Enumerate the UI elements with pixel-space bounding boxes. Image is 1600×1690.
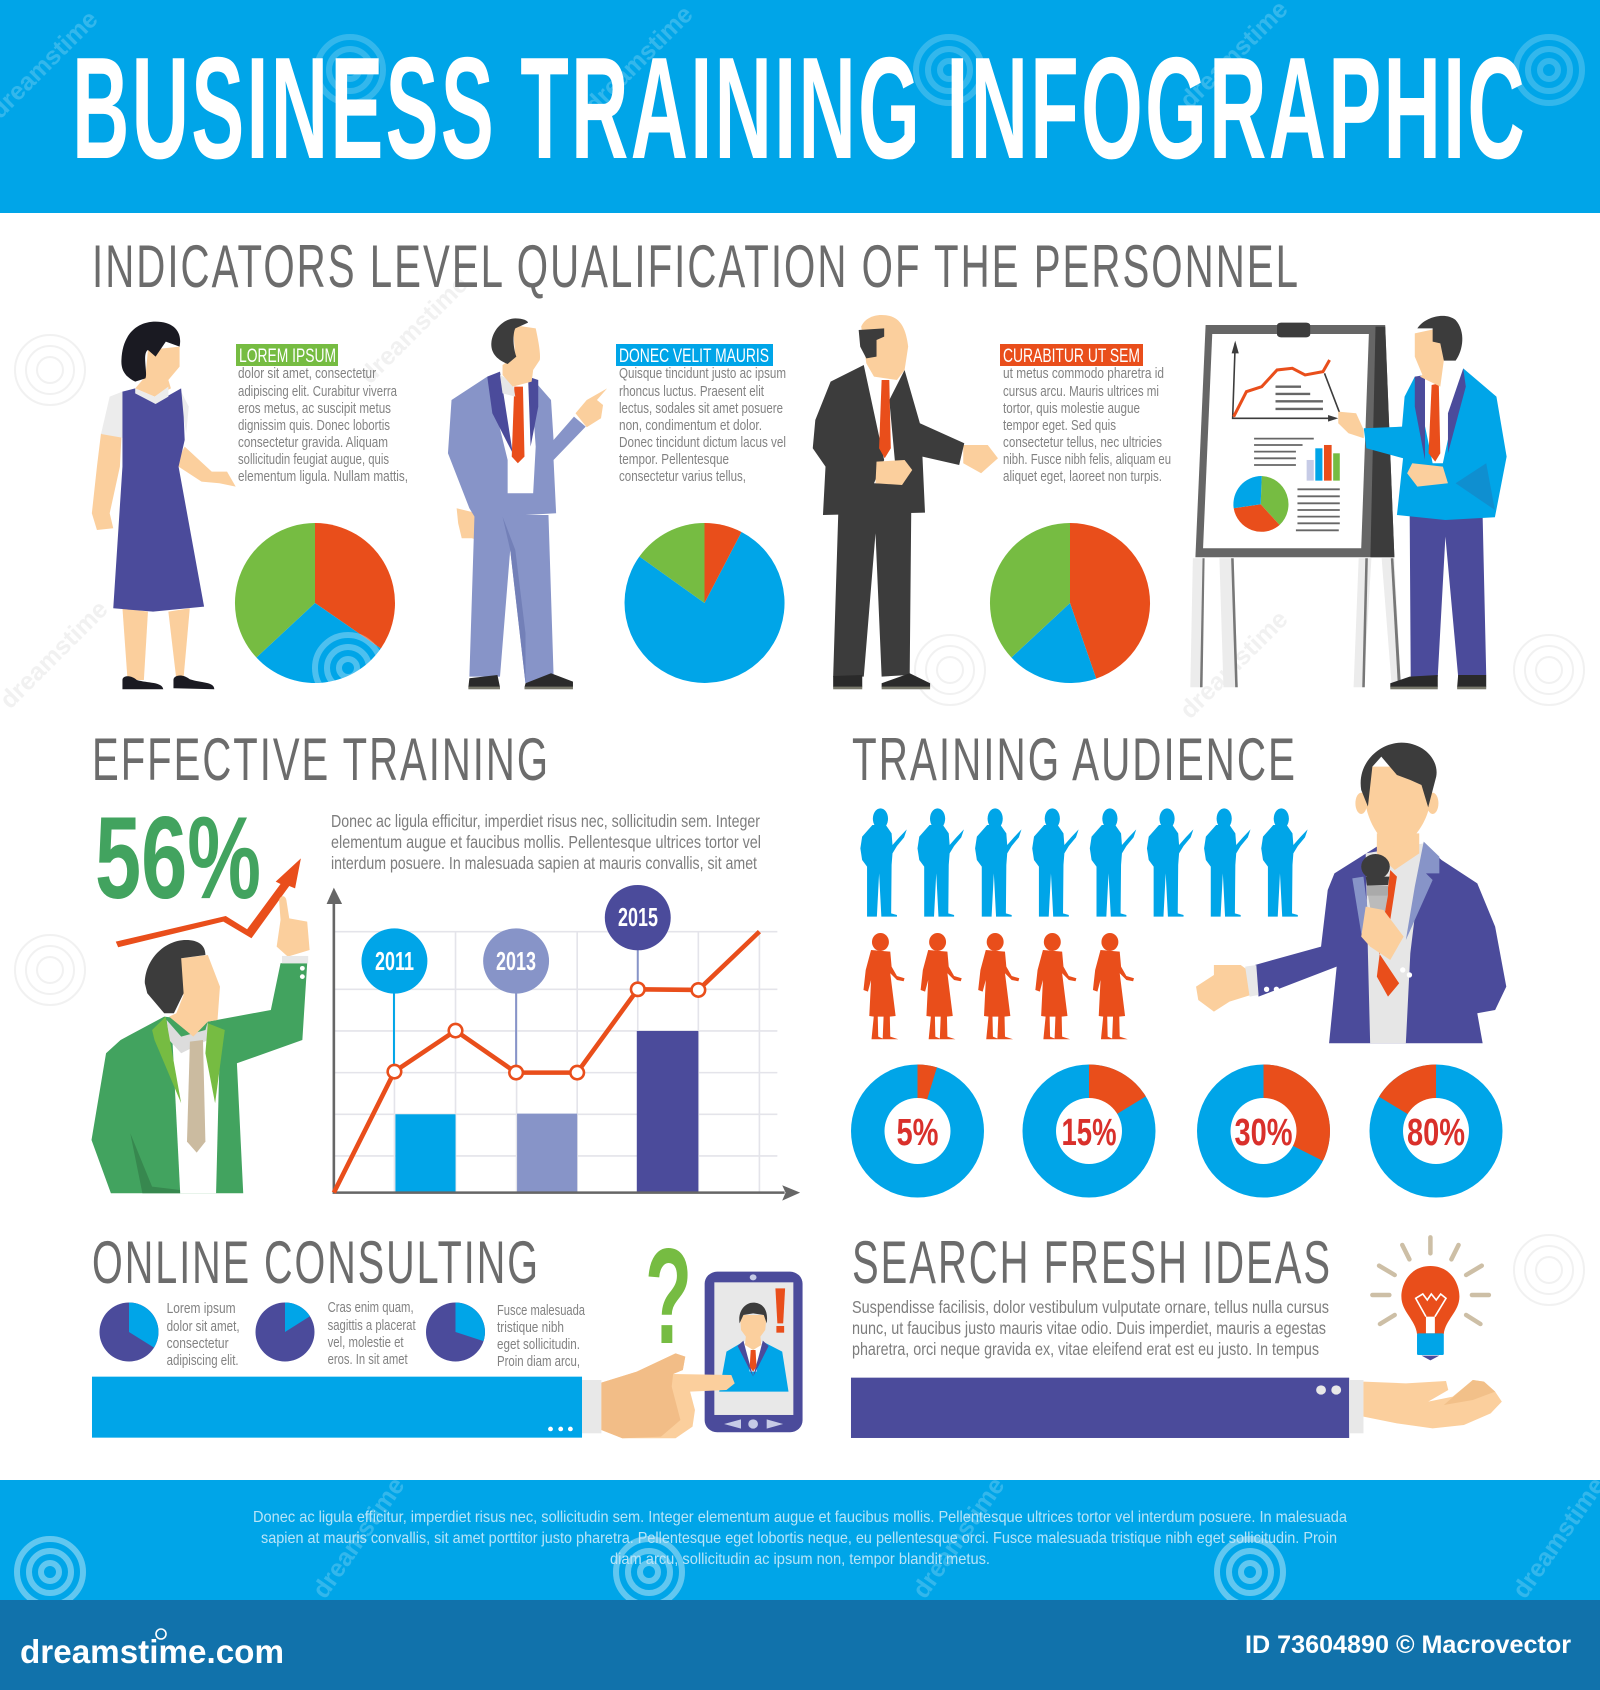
purple sleeve and open hand: [851, 1378, 1502, 1438]
footer text: sapien at mauris convallis, sit amet porttitor justo pharetra. Pellentesque eget lobortis neque, eu pellentesque orci. Fusce malesuada tristique nibh eget sollicitudin. Proin: [261, 1530, 1337, 1547]
text block 1: eros metus, ac suscipit metus: [238, 401, 391, 417]
text block 3: cursus arcu. Mauris ultrices mi: [1003, 384, 1159, 400]
text block: search fresh ideas: nunc, ut faucibus justo mauris vitae odio. Duis imperdiet, mauris a egestas: [852, 1318, 1326, 1338]
figure: man in black suit: [813, 315, 998, 689]
text block 2: Donec tincidunt dictum lacus vel: [619, 435, 786, 451]
mini text 2: eros. In sit amet: [328, 1352, 408, 1368]
label: donec velit mauris: DONEC VELIT MAURIS: [619, 346, 769, 367]
figure: speaker with microphone: [1196, 743, 1506, 1043]
text block: search fresh ideas: pharetra, orci neque gravida ex, vitae eleifend erat est eu justo. In tempus: [852, 1339, 1319, 1359]
line and bar chart: [327, 885, 800, 1201]
rising red arrow: [116, 858, 301, 947]
text block: effective training: Donec ac ligula efficitur, imperdiet risus nec, sollicitudin sem. Integer: [331, 811, 760, 831]
bar 2015: [637, 1031, 698, 1193]
mini pie 3: [426, 1302, 485, 1362]
text block 2: consectetur varius tellus,: [619, 469, 746, 485]
footer text: Donec ac ligula efficitur, imperdiet risus nec, sollicitudin sem. Integer elementum augue et faucibus mollis. Pellentesque ultrices tortor vel interdum posuere. In malesuada: [253, 1509, 1347, 1526]
mini text 1: [167, 1301, 240, 1369]
year labels: 2013: [496, 946, 536, 976]
donut 5 percent: [851, 1064, 984, 1198]
text block 2: tempor. Pellentesque: [619, 452, 729, 468]
mini text 3: tristique nibh: [497, 1320, 564, 1336]
text block 1: elementum ligula. Nullam mattis,: [238, 469, 408, 485]
mini pie 1: [100, 1302, 158, 1362]
pie chart 3: [990, 523, 1150, 683]
donut 30 percent: 30%: [1234, 1112, 1292, 1154]
question mark: ?: [645, 1220, 692, 1372]
text block 3: [1003, 366, 1171, 485]
year bubbles: [361, 928, 427, 994]
heading: search fresh ideas: SEARCH FRESH IDEAS: [852, 1229, 1332, 1296]
mini text 2: sagittis a placerat: [328, 1318, 416, 1334]
mini text 1: Lorem ipsum: [167, 1301, 236, 1317]
footer text: diam arcu, sollicitudin ac ipsum non, tempor blandit metus.: [610, 1551, 990, 1568]
statistic: 56 percent: 56%: [95, 792, 261, 923]
mini text 1: adipiscing elit.: [167, 1353, 239, 1369]
mini text 3: [497, 1303, 586, 1370]
text block: effective training: elementum augue et faucibus mollis. Pellentesque ultrices tortor vel: [331, 832, 761, 852]
credit bar: [0, 1600, 1600, 1690]
label: lorem ipsum: LOREM IPSUM: [239, 346, 336, 367]
text block 3: aliquet eget, laoreet non turpis.: [1003, 469, 1162, 485]
credit bar: ID 73604890 © Macrovector: [1245, 1631, 1571, 1659]
bar 2011: [395, 1114, 456, 1193]
pie chart 1: [235, 523, 395, 701]
mini text 3: eget sollicitudin.: [497, 1337, 580, 1353]
text block 3: ut metus commodo pharetra id: [1003, 366, 1164, 382]
text block 1: sollicitudin feugiat augue, quis: [238, 452, 389, 468]
red trend line: [334, 932, 759, 1193]
donut 5 percent: 5%: [896, 1112, 938, 1154]
figure: presenter in blue jacket: [1338, 316, 1507, 689]
audience: men row: [860, 808, 1308, 917]
label: lorem ipsum: [236, 344, 338, 367]
year labels: 2011: [375, 946, 414, 976]
label: donec velit mauris: [616, 344, 773, 367]
text block: search fresh ideas: [852, 1297, 1329, 1359]
text block 3: tortor, quis molestie augue: [1003, 401, 1140, 417]
text block: effective training: [331, 811, 761, 873]
mini text 2: vel, molestie et: [328, 1335, 404, 1351]
footer text: [253, 1509, 1347, 1568]
pie chart 2: [625, 523, 785, 683]
bar 2013: [517, 1114, 577, 1193]
footer band: [0, 1472, 1600, 1605]
header band: [0, 0, 1600, 213]
text block 2: non, condimentum et dolor.: [619, 418, 762, 434]
footer band: dreamstime: [307, 1472, 410, 1603]
year labels: 2015: [618, 902, 658, 932]
heading: training audience: TRAINING AUDIENCE: [852, 726, 1297, 793]
label: curabitur ut sem: CURABITUR UT SEM: [1003, 346, 1140, 367]
donut 80 percent: 80%: [1407, 1112, 1465, 1154]
mini text 1: dolor sit amet,: [167, 1319, 240, 1335]
figure: man in light purple suit: [448, 318, 607, 689]
text block 1: adipiscing elit. Curabitur viverra: [238, 384, 398, 400]
stems: [393, 993, 395, 1065]
heading: online consulting: ONLINE CONSULTING: [92, 1229, 540, 1296]
donut 15 percent: 15%: [1062, 1112, 1116, 1154]
mini text 1: consectetur: [167, 1336, 229, 1352]
text block 2: [619, 366, 786, 485]
mini text 2: [328, 1300, 416, 1368]
text block: search fresh ideas: Suspendisse facilisis, dolor vestibulum vulputate ornare, tellus nulla cursus: [852, 1297, 1329, 1317]
line markers: [388, 983, 705, 1079]
mini pie 2: [256, 1302, 314, 1362]
icon: light bulb with rays: [1372, 1237, 1489, 1360]
text block 3: nibh. Fusce nibh felis, aliquam eu: [1003, 452, 1171, 468]
text block 1: dignissim quis. Donec lobortis: [238, 418, 390, 434]
mini text 3: Proin diam arcu,: [497, 1354, 580, 1370]
heading: effective training: EFFECTIVE TRAINING: [92, 726, 550, 793]
text block 3: tempor eget. Sed quis: [1003, 418, 1116, 434]
text block: effective training: interdum posuere. In malesuada sapien at mauris convallis, sit amet: [331, 853, 757, 873]
credit bar: dreamstime.com: [20, 1633, 284, 1670]
phone with person on screen: [705, 1272, 803, 1432]
flipchart: [1190, 323, 1401, 687]
blue sleeve and pointing hand: [92, 1353, 735, 1438]
mini text 3: Fusce malesuada: [497, 1303, 586, 1319]
donut 15 percent: [1022, 1064, 1156, 1198]
year labels: [375, 902, 658, 976]
text block 2: Quisque tincidunt justo ac ipsum: [619, 366, 786, 382]
donut 30 percent: [1197, 1064, 1330, 1198]
figure: woman in purple dress: [92, 322, 236, 689]
text block 1: dolor sit amet, consectetur: [238, 366, 376, 382]
faint watermarks: [0, 270, 1584, 1305]
footer band: dreamstime: [907, 1472, 1010, 1603]
audience: women row: [863, 933, 1134, 1039]
figure: man in green jacket pointing up: [92, 896, 310, 1193]
text block 1: [238, 366, 408, 485]
text block 2: lectus, sodales sit amet posuere: [619, 401, 783, 417]
label: curabitur ut sem: [1000, 344, 1143, 367]
donut 80 percent: [1370, 1064, 1502, 1198]
text block 3: consectetur tellus, nec ultricies: [1003, 435, 1162, 451]
header band: dreamstime: [579, 0, 699, 119]
faint watermarks: dreamstime: [1174, 605, 1294, 724]
mini text 2: Cras enim quam,: [328, 1300, 414, 1316]
faint watermarks: dreamstime: [354, 270, 474, 389]
text block 2: rhoncus luctus. Praesent elit: [619, 384, 764, 400]
text block 1: consectetur gravida. Aliquam: [238, 435, 388, 451]
